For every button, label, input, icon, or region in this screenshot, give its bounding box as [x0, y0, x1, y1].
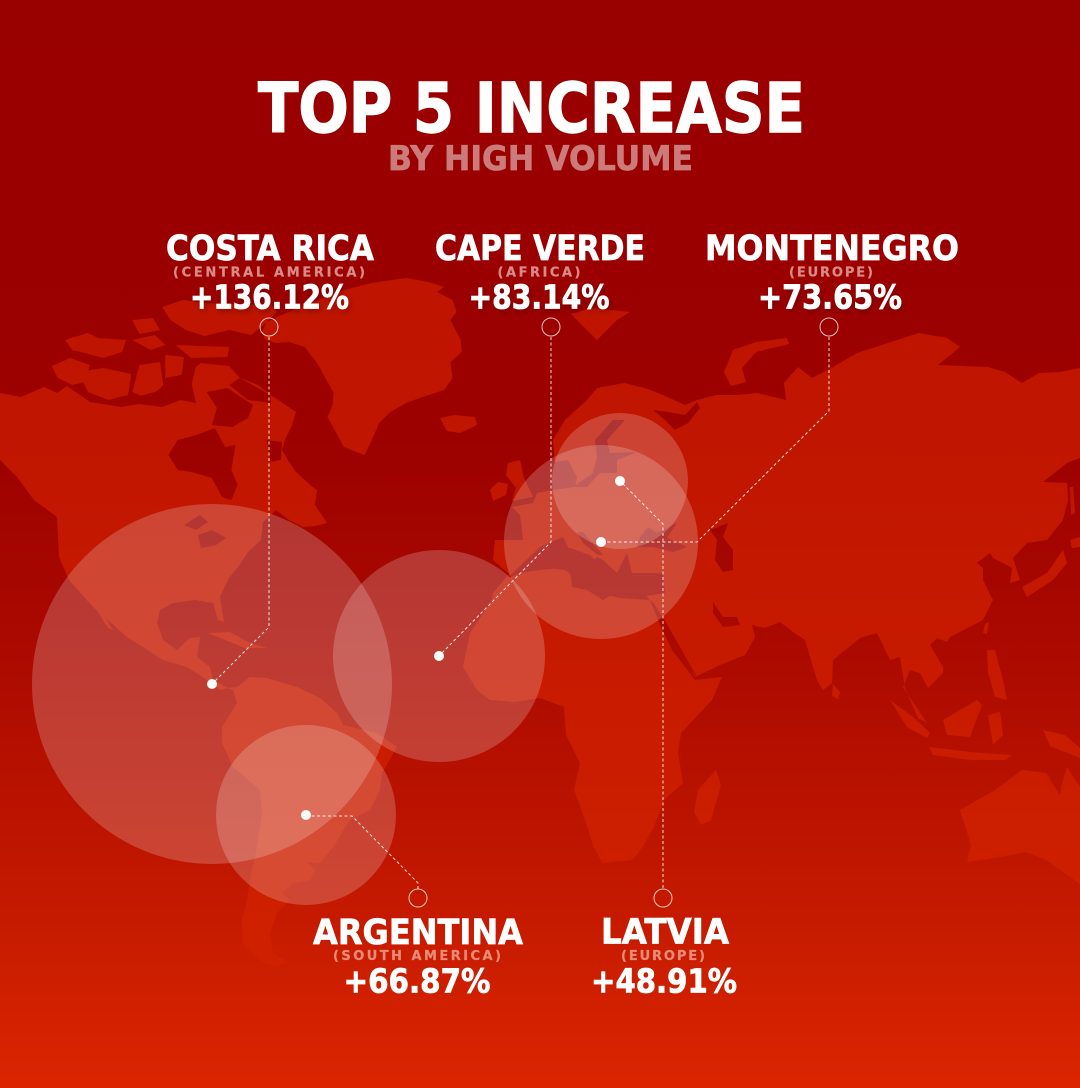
- land: Eurasia: [493, 333, 1080, 723]
- water: Hudson Bay and Canadian channels: [122, 340, 282, 500]
- land: Africa and Arabia: [463, 562, 722, 863]
- land: Baja California and Caribbean: [90, 600, 267, 648]
- land: North America: [0, 363, 327, 690]
- label: Costa Rica: [166, 229, 374, 316]
- water: Western Mediterranean: [508, 537, 590, 577]
- label: Costa Rica: COSTA RICA: [166, 229, 374, 269]
- land: South America: [222, 677, 397, 967]
- leader: Cape Verde: [434, 318, 560, 661]
- water: Great Lakes: [184, 515, 226, 548]
- title: TOP 5 INCREASE: [258, 69, 805, 149]
- label: Argentina: +66.87%: [344, 962, 490, 1000]
- water: Eastern Mediterranean: [570, 553, 665, 600]
- label: Latvia: (EUROPE): [621, 949, 705, 964]
- land: Iceland and UK: [440, 415, 533, 501]
- water: Baltic Sea: [573, 420, 637, 487]
- label: Cape Verde: +83.14%: [468, 278, 610, 316]
- label: Cape Verde: [435, 229, 645, 316]
- label: Montenegro: [705, 229, 959, 316]
- water: Red Sea: [653, 603, 697, 677]
- land: Madagascar and Sri Lanka: [694, 684, 840, 825]
- water: Gulf of Carpentaria: [1046, 760, 1066, 795]
- leader: Costa Rica: [207, 318, 278, 689]
- leader: Montenegro: [596, 318, 838, 547]
- label: Latvia: [591, 912, 737, 1000]
- bubble: Latvia: [552, 413, 688, 549]
- label: Cape Verde: CAPE VERDE: [435, 229, 645, 269]
- bubble: Costa Rica: [32, 504, 392, 864]
- label: Costa Rica: (CENTRAL AMERICA): [173, 266, 365, 280]
- water: Caspian Sea: [710, 523, 733, 572]
- water: Adriatic Sea: [577, 532, 603, 555]
- label: Montenegro: (EUROPE): [789, 266, 873, 280]
- land: Greenland and Arctic islands: [52, 278, 462, 455]
- bubble: Cape Verde: [333, 550, 545, 762]
- subtitle: BY HIGH VOLUME: [388, 139, 693, 179]
- bubble: Argentina: [216, 725, 396, 905]
- leader: Latvia: [615, 476, 672, 907]
- label: Argentina: (SOUTH AMERICA): [333, 949, 501, 964]
- label: Costa Rica: +136.12%: [190, 278, 349, 316]
- label: Argentina: [313, 913, 523, 1000]
- land: Sakhalin and Taiwan: [983, 487, 1075, 634]
- bubble: Montenegro: [504, 445, 698, 639]
- label: Montenegro: MONTENEGRO: [705, 229, 959, 269]
- land: Southeast Asia islands: [890, 650, 1012, 760]
- water: Persian Gulf: [713, 602, 740, 627]
- land: Svalbard and Novaya Zemlya: [571, 308, 789, 386]
- label: Cape Verde: (AFRICA): [498, 266, 580, 280]
- water: White Sea: [653, 402, 700, 430]
- label: Argentina: ARGENTINA: [313, 913, 523, 953]
- land: Japan and Hokkaido: [1022, 537, 1080, 597]
- label: Latvia: LATVIA: [601, 912, 729, 952]
- leader: Argentina: [301, 810, 427, 907]
- label: Latvia: +48.91%: [591, 962, 737, 1000]
- land: Australia: [960, 767, 1080, 884]
- water: Black Sea: [637, 523, 687, 552]
- world map: [0, 278, 1080, 967]
- land: New Guinea: [1043, 730, 1080, 758]
- label: Montenegro: +73.65%: [758, 278, 902, 316]
